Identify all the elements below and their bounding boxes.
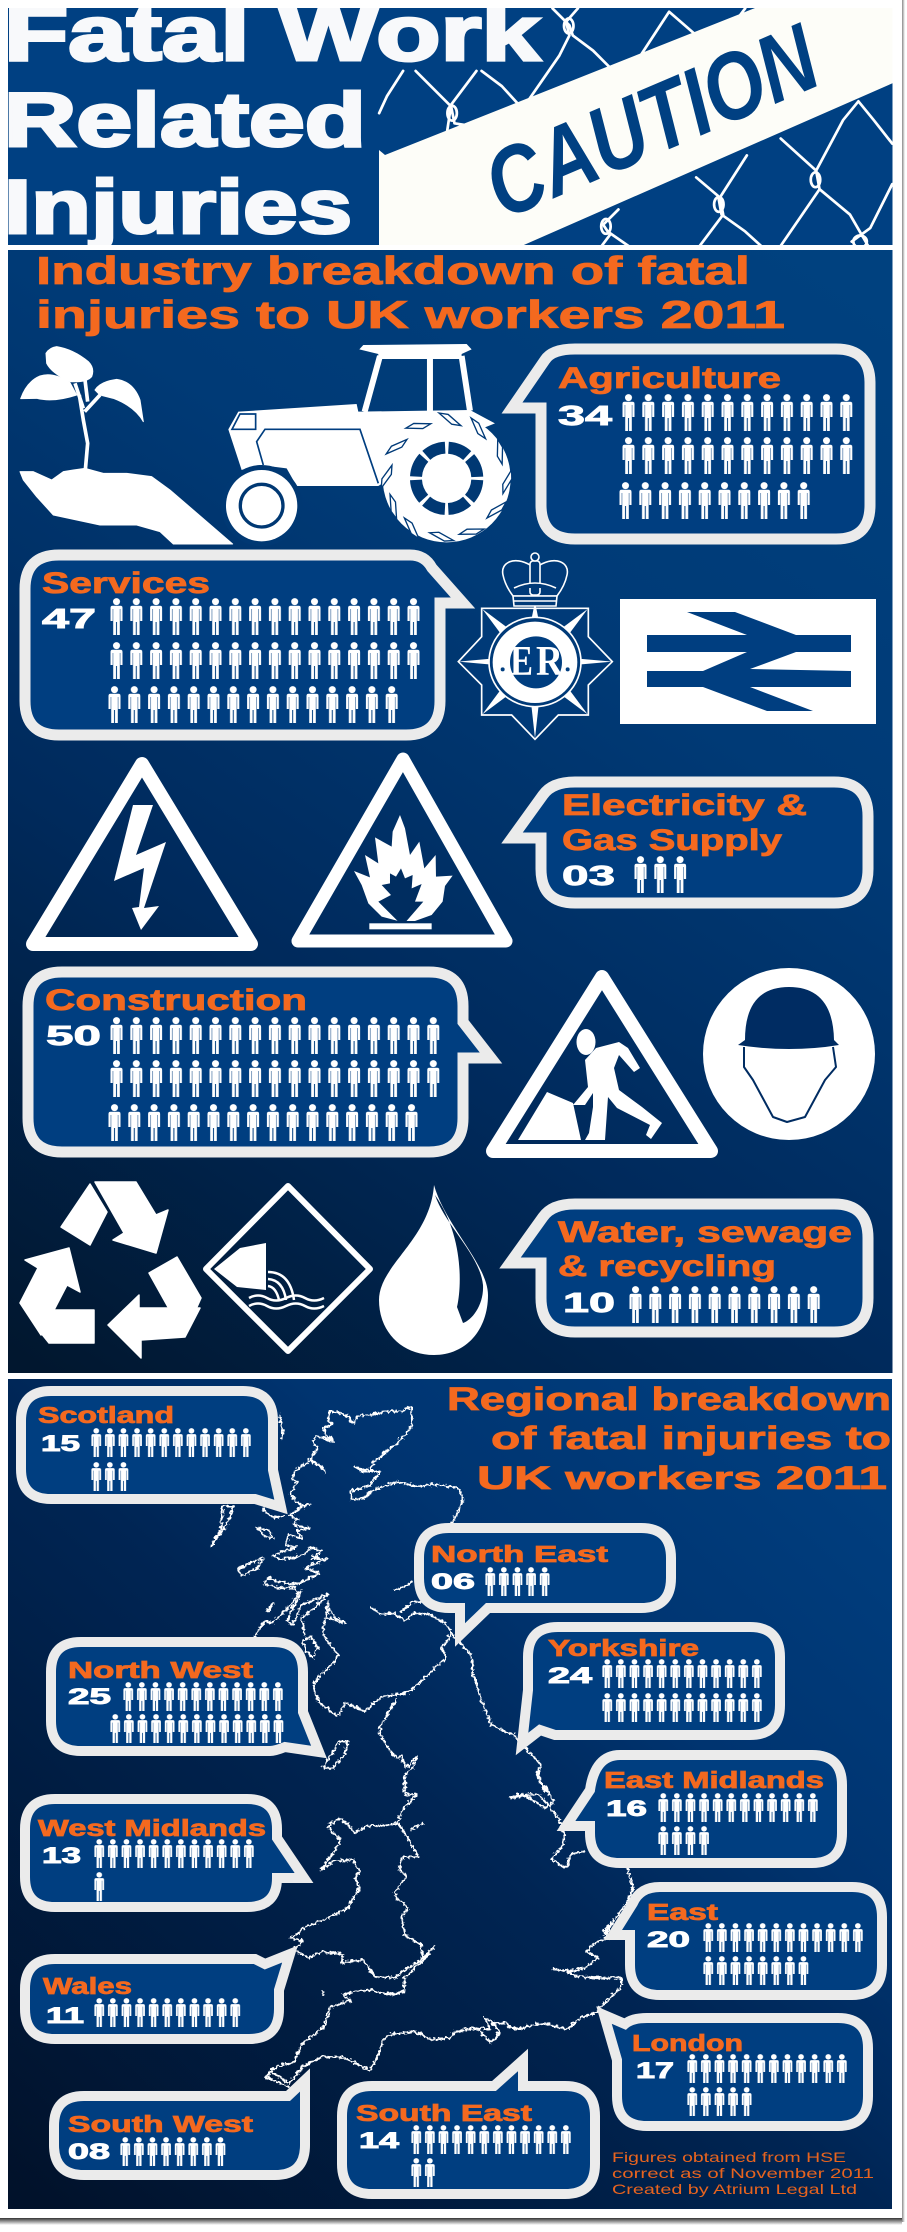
speech bubble shape [613, 1887, 882, 1995]
count: 06 [431, 1569, 475, 1594]
speech bubble shape [54, 2080, 305, 2175]
lightning bolt [114, 805, 166, 930]
industry heading: Industry breakdown of fatal [36, 250, 750, 293]
people icons [411, 2125, 571, 2187]
speech bubble shape [566, 1755, 842, 1863]
chain link fence [379, 8, 892, 248]
bubble: construction [28, 972, 491, 1152]
source note: correct as of November 2011 [612, 2165, 874, 2181]
count: 16 [606, 1796, 647, 1821]
count: 50 [46, 1020, 101, 1051]
header panel [4, 0, 893, 250]
icon: men at work triangle [493, 977, 711, 1151]
title: Related [4, 78, 366, 163]
speech bubble shape [25, 1954, 290, 2039]
count: 03 [562, 860, 615, 891]
icon: sewage outfall diamond [206, 1186, 370, 1351]
people icons [94, 1839, 254, 1901]
icon: British Rail logo [620, 599, 876, 724]
label: South East [356, 2100, 532, 2126]
bubble: services [25, 555, 463, 735]
source note: Figures obtained from HSE [612, 2149, 846, 2165]
bubble: East [613, 1887, 882, 1995]
speech bubble shape [28, 972, 491, 1152]
people icons [120, 2137, 226, 2166]
industry heading [36, 250, 785, 337]
speech bubble shape [342, 2060, 595, 2194]
count: 08 [68, 2139, 110, 2164]
source note [612, 2149, 874, 2197]
icon: recycling arrows [20, 1182, 201, 1358]
bubble: West Midlands [25, 1799, 304, 1907]
people icons [703, 1923, 863, 1985]
label: Wales [43, 1973, 132, 1999]
count: 24 [548, 1663, 593, 1688]
badge letters [510, 639, 564, 685]
bubble: water, sewage and recycling [510, 1204, 868, 1332]
badge letters: R [536, 639, 564, 685]
bubble: Wales [25, 1954, 290, 2039]
icon: hard hat sign [703, 968, 875, 1140]
people icons [658, 1793, 818, 1855]
label: & recycling [558, 1250, 776, 1283]
panel: regional breakdown [8, 1379, 892, 2209]
count: 20 [647, 1927, 690, 1952]
people icons [687, 2054, 847, 2116]
regional heading: UK workers 2011 [477, 1460, 887, 1496]
people icons [108, 598, 421, 723]
bubble: electricity and gas [512, 782, 868, 903]
label [558, 1216, 852, 1283]
label: North East [431, 1541, 608, 1567]
speech bubble shape [419, 1528, 671, 1635]
regional heading [447, 1381, 891, 1496]
caution tape [379, 8, 893, 248]
industry heading: injuries to UK workers 2011 [36, 294, 785, 337]
label: Construction [45, 984, 307, 1017]
label: South West [68, 2111, 253, 2137]
label [562, 789, 807, 857]
label: East [647, 1899, 718, 1925]
bubble: Scotland [21, 1391, 281, 1507]
bubble: East Midlands [566, 1755, 842, 1863]
bubble: North West [51, 1642, 319, 1752]
count: 47 [42, 603, 96, 634]
speech bubble shape [510, 1204, 868, 1332]
count: 34 [558, 400, 613, 431]
count: 13 [42, 1843, 81, 1868]
label: Services [42, 567, 210, 600]
label: Electricity & [562, 789, 807, 822]
speech bubble shape [604, 2015, 868, 2126]
map of Great Britain [210, 1406, 632, 2085]
people icons [629, 1286, 821, 1323]
label: Scotland [38, 1402, 174, 1428]
speech bubble shape [512, 782, 868, 903]
icon: tractor [221, 344, 515, 546]
worker figure [518, 1029, 662, 1140]
count: 17 [636, 2058, 674, 2083]
count: 15 [41, 1431, 80, 1456]
speech bubble shape [25, 555, 463, 735]
bubble: Yorkshire [522, 1627, 780, 1744]
label: West Midlands [38, 1815, 266, 1841]
source note: Created by Atrium Legal Ltd [612, 2181, 857, 2197]
icon: electricity warning triangle [33, 764, 251, 944]
people icons [91, 1428, 251, 1491]
people icons [110, 1682, 284, 1743]
count: 14 [359, 2128, 400, 2153]
count: 11 [46, 2003, 84, 2028]
regional heading: of fatal injuries to [491, 1420, 891, 1456]
people icons [94, 1998, 241, 2027]
speech bubble shape [522, 1627, 780, 1744]
speech bubble shape [25, 1799, 304, 1907]
icon: seedling in hand [20, 347, 233, 544]
bubble: South East [342, 2060, 595, 2194]
people icons [485, 1567, 550, 1596]
icon: flammable warning triangle [298, 759, 506, 941]
title: Injuries [4, 165, 352, 250]
count: 10 [563, 1287, 615, 1318]
label: North West [68, 1657, 253, 1683]
label: Water, sewage [558, 1216, 852, 1249]
people icons [619, 394, 853, 519]
icon: police badge [458, 553, 612, 739]
label: East Midlands [604, 1767, 824, 1793]
people icons [602, 1659, 762, 1722]
flame [354, 815, 453, 929]
crown [503, 553, 567, 606]
icon: water drop [379, 1185, 488, 1355]
people icons [634, 856, 687, 893]
bubble: South West [54, 2080, 305, 2175]
label: Yorkshire [548, 1635, 699, 1661]
count: 25 [68, 1684, 111, 1709]
regional heading: Regional breakdown [447, 1381, 891, 1417]
speech bubble shape [21, 1391, 281, 1507]
label: London [632, 2030, 743, 2056]
label: Agriculture [558, 362, 781, 395]
panel: industry breakdown [8, 250, 892, 1373]
bubble: North East [419, 1528, 671, 1635]
label: Gas Supply [562, 824, 782, 857]
bubble: London [604, 2015, 868, 2126]
speech bubble shape [51, 1642, 319, 1752]
people icons [108, 1017, 443, 1141]
bubble: agriculture [512, 349, 870, 539]
title [4, 0, 541, 250]
badge letters: E [510, 639, 533, 685]
speech bubble shape [512, 349, 870, 539]
